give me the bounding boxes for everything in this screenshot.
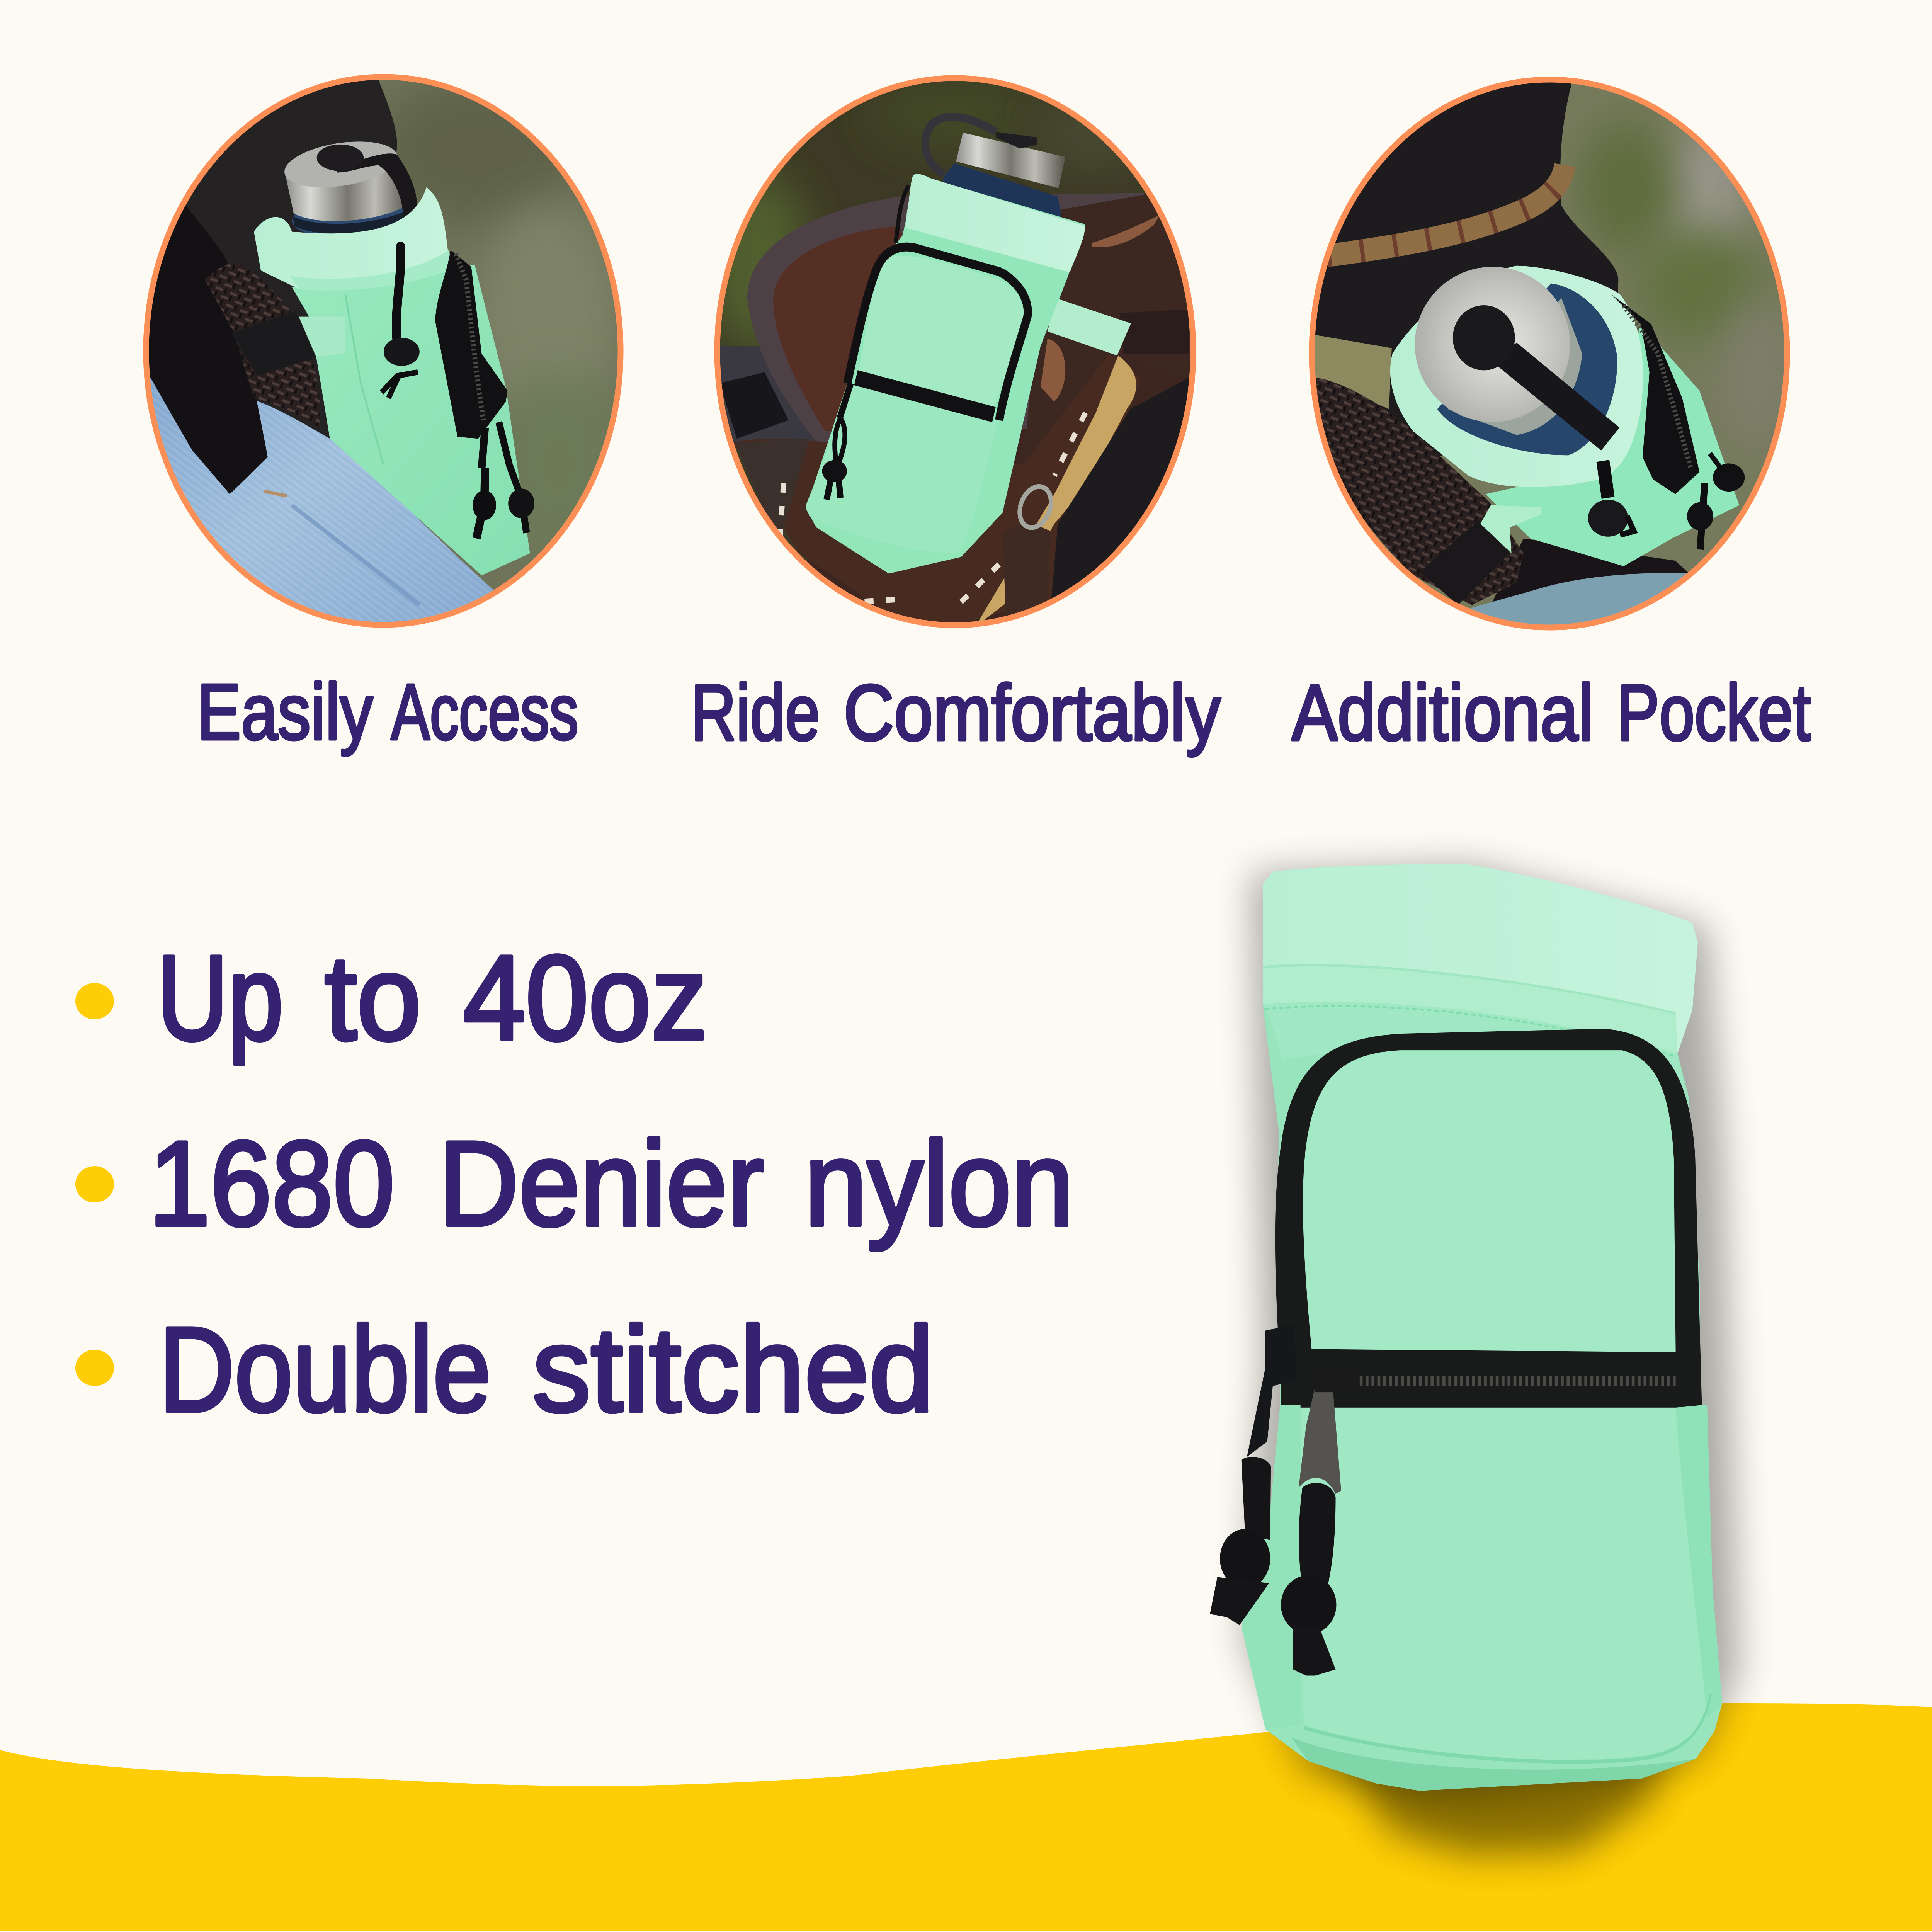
bottom seam	[1304, 1694, 1711, 1762]
side cord knot	[1210, 1457, 1271, 1625]
bag drop shadow	[1244, 866, 1739, 1855]
drawcord knob	[1588, 461, 1634, 537]
main cord knot	[1281, 1483, 1336, 1675]
left gusset	[1242, 1405, 1301, 1729]
woven saddle	[1306, 376, 1524, 605]
bullet: 1680 denier nylon: nylon	[804, 1117, 1074, 1252]
stitching	[1264, 1006, 1676, 1056]
zipper cord pulls	[473, 422, 534, 539]
side seam	[345, 294, 383, 464]
black shirt	[137, 204, 268, 494]
bottle cap	[282, 135, 420, 234]
caption: easily access: Easily	[197, 668, 373, 756]
buckle strap	[1003, 481, 1057, 620]
bullet: up to 40oz	[75, 931, 707, 1066]
pouch body	[1242, 864, 1722, 1791]
horse	[130, 65, 402, 442]
caption: easily access	[197, 668, 578, 756]
photo 1: easily access	[143, 74, 624, 628]
mint strap	[299, 317, 345, 357]
yellow wave footer	[0, 1703, 1932, 1931]
tooled leather right	[1023, 193, 1196, 464]
lower pocket panel	[1299, 1408, 1709, 1760]
pocket zipper	[435, 250, 507, 439]
product: mint pouch	[1210, 864, 1722, 1791]
caption: ride comfortably: Ride	[691, 668, 820, 757]
white stitching	[780, 413, 1085, 609]
bottle body	[1437, 284, 1617, 455]
leopard panel	[1306, 333, 1392, 409]
cantle rim	[747, 193, 1155, 446]
cuff seam	[1263, 965, 1676, 1014]
side strap	[1480, 505, 1541, 553]
saddle dark pad	[716, 346, 820, 446]
jeans	[1468, 573, 1689, 627]
bag body	[806, 174, 1085, 573]
side buckle	[1420, 520, 1510, 605]
braided rein	[1327, 165, 1565, 256]
pocket panel	[858, 256, 1024, 413]
drawcord	[382, 247, 420, 398]
bottle body	[937, 163, 1062, 235]
side zipper pull	[1247, 1325, 1297, 1457]
pocket zipper	[847, 247, 1028, 420]
caption: ride comfortably: Comfortably	[844, 668, 1221, 757]
upper pocket panel	[1303, 1050, 1676, 1352]
mint strap	[1048, 298, 1131, 355]
cord along top	[896, 185, 909, 243]
photo 2: ride comfortably	[696, 58, 1236, 650]
bullet: up to 40oz: to	[325, 931, 421, 1065]
bullet: 1680 denier nylon	[75, 1117, 1074, 1252]
bullet: up to 40oz: Up	[157, 931, 283, 1066]
collar band	[1264, 1002, 1687, 1097]
caption: additional pocket: Pocket	[1617, 668, 1811, 757]
pocket zipper	[1612, 294, 1699, 494]
cuff fold	[1263, 965, 1677, 1053]
dark blanket	[1051, 376, 1192, 605]
black tab	[317, 145, 364, 171]
caption: additional pocket	[1292, 668, 1811, 757]
caption: ride comfortably	[691, 668, 1221, 757]
zipper teeth	[1360, 1378, 1676, 1384]
grass background	[379, 80, 617, 590]
top cuff	[1263, 864, 1698, 1053]
photo 3: additional pocket	[1275, 58, 1816, 638]
bullet list	[75, 931, 1074, 1437]
cap side	[1447, 298, 1582, 435]
lower skirt leather	[733, 354, 1141, 634]
black tab	[1453, 305, 1619, 451]
bullet: 1680 denier nylon: 1680	[149, 1117, 395, 1251]
grass background	[1275, 58, 1816, 638]
bottle cap	[956, 133, 1065, 188]
saddle leather	[205, 263, 320, 428]
suede seat	[773, 226, 971, 431]
bottom fold	[1291, 1737, 1696, 1791]
lower pocket	[806, 383, 999, 553]
black strap	[337, 153, 417, 220]
bag body	[1486, 324, 1739, 566]
bullet: double stitched: Double	[159, 1303, 491, 1437]
orange frame	[717, 78, 1193, 625]
bullet: double stitched	[75, 1303, 934, 1437]
bullet: up to 40oz: 40oz	[463, 931, 707, 1065]
main zipper pull	[1299, 1367, 1360, 1494]
bottle body	[292, 200, 427, 241]
brown base	[799, 193, 1213, 650]
right gusset	[1676, 1405, 1722, 1719]
bullet: double stitched: stitched	[532, 1303, 934, 1437]
bag body	[292, 265, 530, 575]
bag cuff	[254, 187, 451, 291]
caption: easily access: Access	[391, 668, 578, 756]
cap disc	[1415, 267, 1570, 422]
bag cuff	[906, 174, 1085, 272]
zipper surround	[1275, 1029, 1702, 1408]
caption: additional pocket: Additional	[1292, 668, 1594, 757]
jeans	[130, 317, 494, 642]
zipper cord pull	[822, 383, 851, 500]
bag cuff	[1390, 266, 1643, 487]
zipper cord pulls	[1687, 454, 1745, 549]
handle loop	[925, 117, 996, 174]
orange frame	[1312, 80, 1787, 628]
orange frame	[146, 77, 621, 625]
side buckle	[231, 311, 316, 376]
bullet: 1680 denier nylon: Denier	[439, 1117, 764, 1251]
denim texture	[130, 317, 494, 642]
sheepskin fleece	[975, 355, 1136, 627]
dark underside	[1489, 539, 1689, 609]
horse	[1289, 65, 1618, 464]
foliage background	[696, 58, 1236, 638]
